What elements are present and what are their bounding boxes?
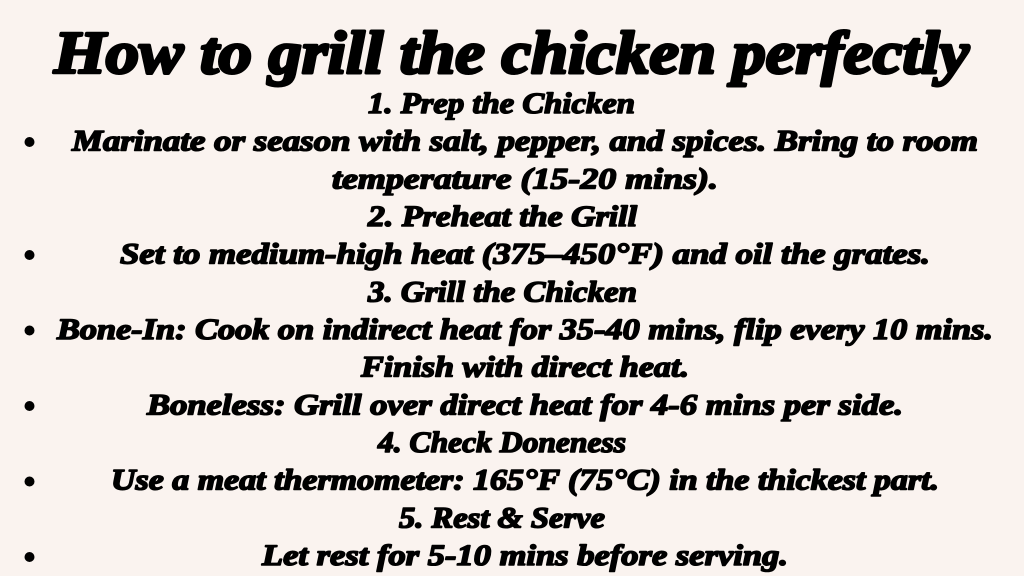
- step 2 text: Set to medium-high heat (375–450°F) and oil the grates.: [120, 238, 930, 270]
- step 4 text: Use a meat thermometer: 165°F (75°C) in the thickest part.: [111, 464, 939, 496]
- step 5 heading: 5. Rest & Serve: [399, 502, 605, 534]
- step 3 bone-in text line 1: Bone-In: Cook on indirect heat for 35-40 mins, flip every 10 mins.: [56, 313, 993, 346]
- bullet: [24, 476, 34, 486]
- step 3 heading: 3. Grill the Chicken: [367, 276, 637, 308]
- step 1 text line 2: temperature (15-20 mins).: [332, 162, 718, 196]
- bullet: [24, 401, 34, 411]
- title: How to grill the chicken perfectly: [53, 20, 969, 86]
- bullet: [24, 137, 34, 147]
- bullet: [24, 552, 34, 562]
- step 2 heading: 2. Preheat the Grill: [367, 200, 638, 233]
- bullet: [24, 250, 34, 260]
- step 1 heading: 1. Prep the Chicken: [368, 87, 635, 120]
- step 4 heading: 4. Check Doneness: [377, 426, 626, 459]
- bullet: [24, 326, 34, 336]
- step 3 boneless text: Boneless: Grill over direct heat for 4-6 mins per side.: [146, 388, 903, 422]
- step 5 text: Let rest for 5-10 mins before serving.: [261, 539, 788, 572]
- step 1 text line 1: Marinate or season with salt, pepper, and spices. Bring to room: [71, 124, 978, 158]
- step 3 bone-in text line 2: Finish with direct heat.: [360, 350, 689, 384]
